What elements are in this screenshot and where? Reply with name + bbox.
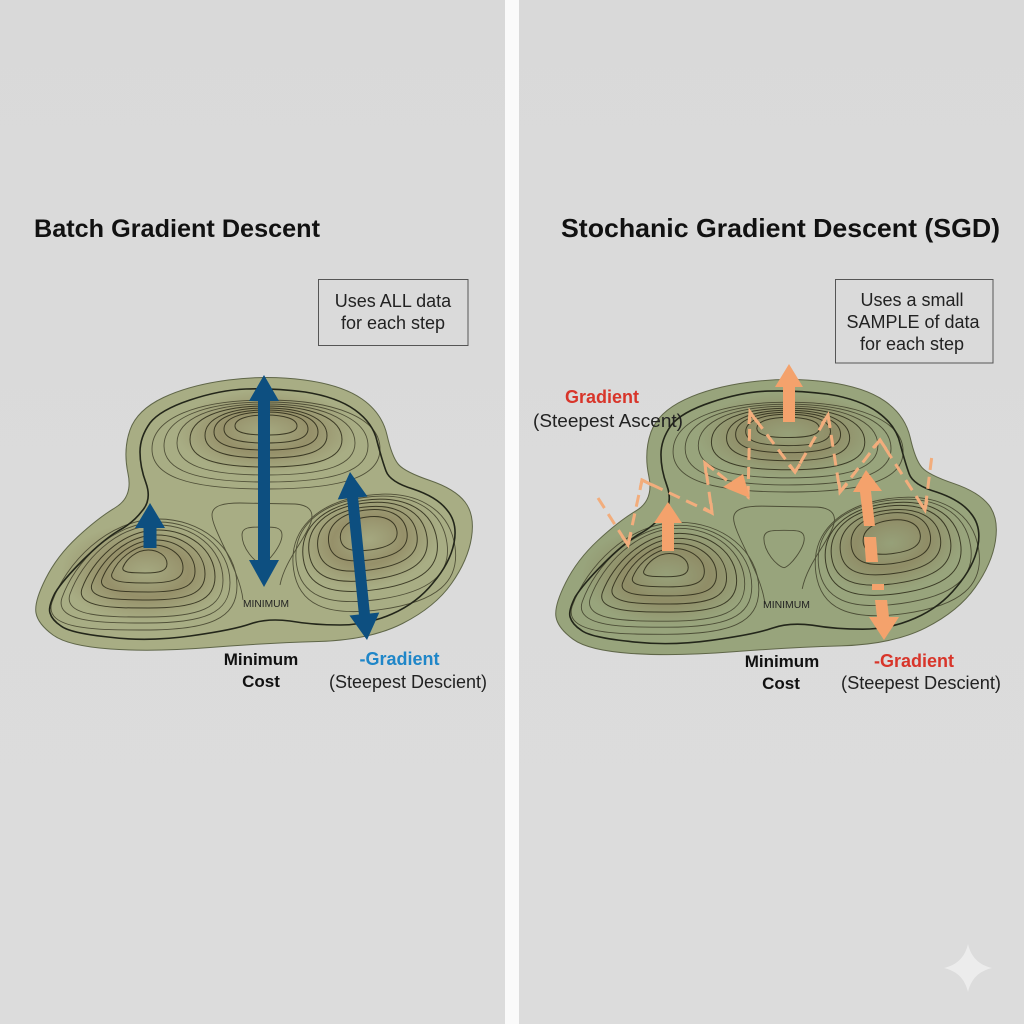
- icon: sparkle watermark: [944, 944, 992, 992]
- label: steepest descent: (Steepest Descient): [329, 672, 487, 692]
- panel: stochastic gradient descent: [519, 0, 1024, 1024]
- callout: uses a small sample: SAMPLE of data: [846, 312, 981, 332]
- callout: uses all data: Uses ALL data: [335, 291, 452, 311]
- callout: uses a small sample: Uses a small: [860, 290, 964, 310]
- arrow: right hill up: [853, 470, 882, 526]
- heading: sgd: Stochanic Gradient Descent (SGD): [561, 213, 1000, 243]
- arrow: small triangle: [723, 474, 750, 498]
- label: minimum cost: Minimum: [745, 652, 819, 671]
- dashed path: stochastic steps: [598, 412, 932, 545]
- panel: batch gradient descent: [0, 0, 505, 1024]
- heading: batch: Batch Gradient Descent: [34, 215, 321, 243]
- label: steepest descent: (Steepest Descient): [841, 673, 1001, 693]
- arrow: left hill: [135, 503, 165, 548]
- arrow: right hill down dashed: [864, 537, 899, 640]
- callout: uses a small sample: [836, 280, 993, 363]
- callout: uses a small sample: for each step: [860, 334, 964, 354]
- contour map: sgd: MINIMUM: [763, 600, 810, 611]
- arrow: right hill: [338, 472, 379, 640]
- contour map: batch: MINIMUM: [243, 599, 289, 610]
- label: negative gradient: -Gradient: [874, 651, 954, 671]
- label: gradient: Gradient: [565, 387, 639, 407]
- arrow: left hill: [654, 502, 682, 551]
- label: minimum cost: Cost: [242, 672, 280, 691]
- arrow: steepest ascent and descent centre: [249, 375, 279, 587]
- callout: uses all data: for each step: [341, 313, 445, 333]
- label: minimum cost: Cost: [762, 674, 800, 693]
- label: negative gradient: -Gradient: [359, 649, 440, 669]
- label: minimum cost: Minimum: [224, 650, 298, 669]
- contour map: sgd: [556, 379, 996, 655]
- contour map: batch: [36, 378, 472, 650]
- label: steepest ascent: (Steepest Ascent): [533, 411, 683, 431]
- arrow: top hill: [775, 364, 803, 422]
- callout: uses all data: [318, 280, 468, 346]
